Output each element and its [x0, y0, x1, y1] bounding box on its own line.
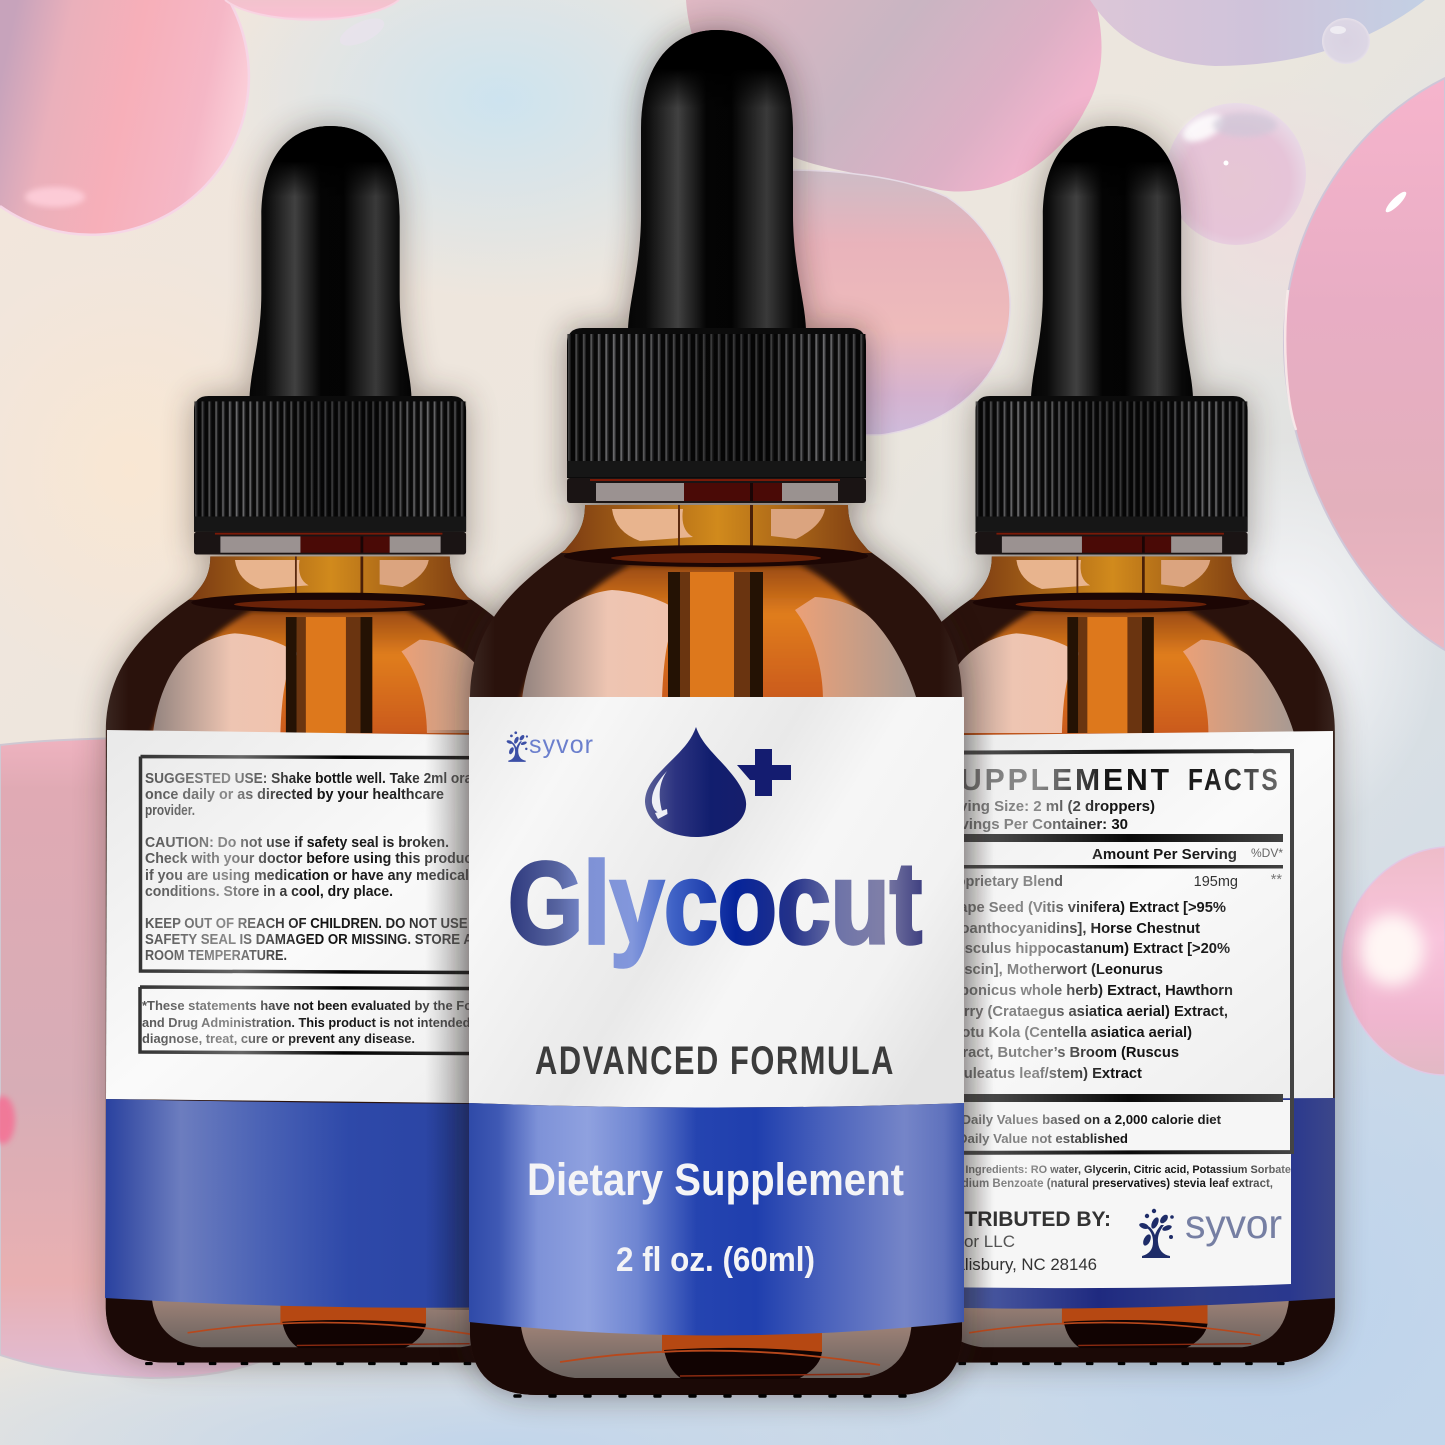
supplement facts panel — [880, 751, 1292, 1153]
blend ingredient list: Extract, Butcher’s Broom (Ruscus — [939, 1045, 1179, 1061]
daily value notes: ** Daily Value not established — [944, 1131, 1128, 1146]
centre bottle body — [465, 30, 970, 1400]
shadow from centre bottle — [950, 733, 994, 1308]
right label blue band — [880, 1098, 1335, 1309]
amount per serving header: Amount Per Serving — [1092, 847, 1237, 863]
daily value notes: * Percent Daily Values based on a 2,000 calorie diet — [901, 1112, 1222, 1127]
icon: blood drop with plus — [645, 727, 791, 837]
bubble: top centre — [686, 0, 1102, 192]
blend ingredient list: (Aesculus hippocastanum) Extract [>20% — [941, 941, 1230, 957]
bubble: tiny under top bubble — [336, 13, 388, 51]
centre label blue band — [469, 1103, 964, 1336]
bubble: behind cap — [790, 170, 1010, 435]
supplement facts heading: SUPPLEMENT — [937, 762, 1172, 797]
suggested use text: SAFETY SEAL IS DAMAGED OR MISSING. STORE AT — [145, 932, 480, 948]
syvor logo — [1138, 1201, 1282, 1258]
suggested use box — [140, 756, 560, 973]
right bottle body — [883, 126, 1342, 1367]
left bottle (back label) — [101, 126, 561, 1367]
suggested use text: KEEP OUT OF REACH OF CHILDREN. DO NOT USE IF — [145, 916, 483, 932]
distributor details: Salisbury, NC 28146 — [944, 1255, 1097, 1274]
icon: syvor tree — [1138, 1209, 1174, 1258]
suggested use text: ROOM TEMPERATURE. — [145, 948, 287, 964]
proprietary blend row: Proprietary Blend — [941, 874, 1063, 890]
blend ingredient list: Aescin], Motherwort (Leonurus — [946, 962, 1163, 978]
blend ingredient list: japonicus whole herb) Extract, Hawthorn — [947, 983, 1233, 999]
right label paper — [880, 731, 1333, 1103]
bubble: top right — [1090, 0, 1425, 66]
bubble: small left edge glow — [0, 1096, 15, 1144]
left label blue band — [105, 1099, 560, 1308]
centre bottle shadow — [470, 30, 962, 1395]
suggested use text: SUGGESTED USE: Shake bottle well. Take 2ml oral — [145, 771, 476, 787]
suggested use text: provider. — [145, 803, 195, 819]
blend ingredient list: aculeatus leaf/stem) Extract — [947, 1066, 1142, 1082]
FDA disclaimer text: *These statements have not been evaluated by the Food — [142, 998, 488, 1013]
syvor small logo: syvor — [529, 731, 593, 759]
other ingredients: Sodium Benzoate (natural preservatives) stevia leaf extract, — [947, 1178, 1273, 1190]
right label lower white panel — [880, 1100, 1291, 1288]
tagline: ADVANCED FORMULA — [535, 1039, 895, 1083]
daily value notes — [901, 1112, 1222, 1146]
suggested use text: if you are using medication or have any medical — [145, 868, 469, 884]
proprietary blend row: 195mg — [1194, 874, 1238, 890]
other ingredients — [933, 1164, 1291, 1190]
blend ingredient list: Berry (Crataegus asiatica aerial) Extract, — [945, 1004, 1228, 1020]
centre bottle (front label) — [465, 30, 970, 1400]
product name: Glycocut — [508, 838, 922, 968]
bubble: right large sparkle — [1383, 189, 1409, 215]
FDA disclaimer box — [140, 987, 560, 1054]
blend ingredient list: Grape Seed (Vitis vinifera) Extract [>95% — [942, 900, 1226, 916]
amount per serving header: %DV* — [1251, 846, 1283, 860]
bubble: top left — [0, 0, 249, 235]
distributor details: Syvor LLC — [936, 1232, 1015, 1251]
volume: 2 fl oz. (60ml) — [616, 1241, 815, 1279]
distributor details — [929, 1208, 1111, 1274]
icon: small tree — [506, 731, 528, 762]
serving information: Serving Size: 2 ml (2 droppers) — [935, 798, 1155, 815]
shadow from centre bottle — [425, 730, 475, 1310]
FDA disclaimer text — [142, 998, 488, 1046]
supplement facts heading: FACTS — [1188, 762, 1280, 797]
bubble: right lower — [1342, 847, 1445, 1075]
dietary supplement heading: Dietary Supplement — [527, 1154, 904, 1205]
blend ingredient list — [939, 900, 1233, 1082]
blend ingredient list: Proanthocyanidins], Horse Chestnut — [945, 921, 1200, 937]
bubble: small clear top right — [1322, 18, 1370, 64]
centre label paper — [469, 697, 964, 1108]
left label paper — [106, 730, 560, 1104]
suggested use text: once daily or as directed by your healthcare — [145, 787, 444, 803]
FDA disclaimer text: diagnose, treat, cure or prevent any disease. — [142, 1031, 415, 1046]
serving information: Servings Per Container: 30 — [936, 816, 1128, 833]
proprietary blend row — [941, 872, 1282, 890]
amount per serving header — [1092, 846, 1283, 863]
suggested use text: Check with your doctor before using this product — [145, 851, 477, 867]
suggested use text — [145, 771, 483, 964]
bubble: right large rim highlight — [1285, 290, 1296, 430]
bubble: top edge — [225, 0, 399, 20]
bubble: right large — [1284, 78, 1445, 650]
serving information — [935, 798, 1155, 833]
FDA disclaimer text: and Drug Administration. This product is not intended to — [142, 1015, 486, 1030]
suggested use text: conditions. Store in a cool, dry place. — [145, 884, 393, 900]
suggested use text: CAUTION: Do not use if safety seal is broken. — [145, 835, 449, 851]
distributor details: DISTRIBUTED BY: — [929, 1208, 1111, 1231]
blend ingredient list: Gotu Kola (Centella asiatica aerial) — [950, 1025, 1192, 1041]
bubble: right lower glow — [1360, 914, 1424, 986]
bubble: top left highlight — [25, 187, 85, 207]
proprietary blend row: ** — [1271, 872, 1282, 888]
left bottle body — [101, 126, 561, 1367]
bubble: clear lilac — [1166, 103, 1306, 245]
bottle shadows — [106, 126, 1335, 1363]
syvor logo: syvor — [1185, 1201, 1282, 1247]
syvor small logo — [506, 731, 593, 762]
right bottle (supplement facts) — [880, 126, 1342, 1367]
other ingredients: Other Ingredients: RO water, Glycerin, Citric acid, Potassium Sorbate — [933, 1164, 1291, 1176]
bubble: left lower — [0, 738, 300, 1378]
